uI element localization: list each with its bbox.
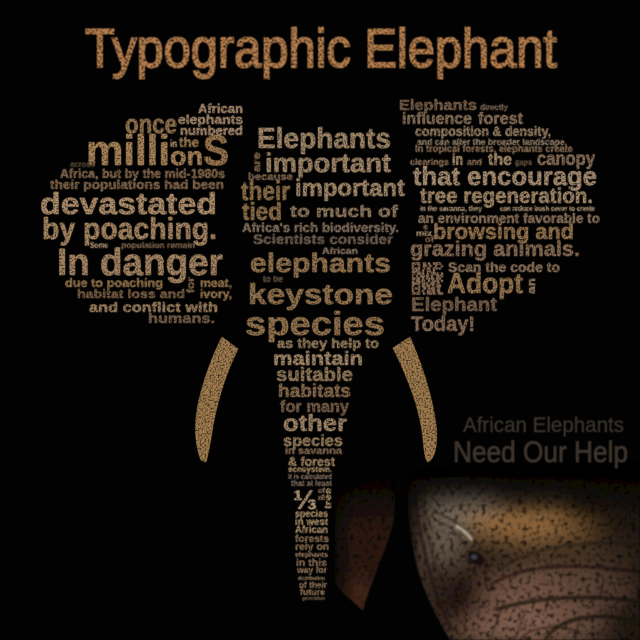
photo: elephant ear fragment bbox=[335, 480, 396, 611]
panel: trunk text: African bbox=[295, 525, 328, 536]
panel: left ear text: population remain bbox=[121, 241, 195, 250]
panel: right ear text: gaps bbox=[515, 158, 533, 167]
panel: right ear text: browsing and bbox=[433, 219, 574, 244]
panel: left ear text bbox=[40, 101, 243, 326]
panel: left ear text: on bbox=[170, 141, 203, 171]
panel: right ear text: an environment favorable to bbox=[418, 210, 600, 226]
panel: right ear text: In tropical forests, elephants create bbox=[415, 144, 573, 155]
panel: left ear text: the bbox=[179, 134, 199, 150]
panel: right ear text: clearings bbox=[410, 157, 449, 167]
panel: right ear text: Elephant bbox=[411, 295, 498, 316]
panel: left ear text: elephants bbox=[178, 112, 243, 127]
panel: trunk text bbox=[273, 335, 379, 602]
photo: skin wrinkles bbox=[415, 485, 640, 640]
photo: elephant face bbox=[335, 476, 640, 640]
tusks bbox=[196, 337, 437, 462]
panel: right ear text: In the savanna, they bbox=[420, 206, 482, 213]
panel: left ear text: Africa, but by the mid-1980s bbox=[60, 166, 225, 181]
panel: trunk text: way for bbox=[296, 565, 327, 575]
panel: right ear text: Adopt bbox=[447, 268, 523, 300]
panel: head text: important bbox=[295, 175, 405, 202]
panel: trunk text: in savanna bbox=[285, 446, 342, 457]
panel: trunk text: ecosystem. bbox=[288, 465, 332, 474]
panel: right ear text: Scan the code to bbox=[448, 259, 560, 275]
panel: trunk text: forests bbox=[295, 534, 329, 545]
panel: left ear text: ivory, bbox=[200, 287, 232, 301]
panel: right ear text: influence bbox=[402, 109, 472, 128]
panel: left ear text: humans. bbox=[148, 310, 215, 326]
panel: left ear text: habitat loss and bbox=[77, 287, 185, 301]
photo: elephant head bbox=[407, 476, 640, 640]
panel: left ear text: numbered bbox=[180, 123, 243, 138]
panel: right ear text: grazing animals. bbox=[410, 238, 580, 261]
panel: head text: tied bbox=[242, 198, 282, 226]
panel: head text: Elephants bbox=[257, 123, 391, 155]
panel: left ear text: due to poaching bbox=[65, 276, 163, 290]
panel: trunk text: of bbox=[318, 488, 326, 495]
panel: right ear text: directly bbox=[480, 103, 509, 112]
panel: trunk text: It is calculated bbox=[288, 474, 332, 481]
panel: right ear text: in bbox=[452, 150, 463, 169]
panel: left ear text: African bbox=[198, 101, 243, 116]
panel: right ear text bbox=[399, 97, 600, 336]
panel: right ear text: Today! bbox=[411, 313, 475, 336]
panel: head text: because bbox=[248, 172, 293, 183]
panel: left ear text: In danger bbox=[57, 242, 223, 284]
panel: trunk text: rely on bbox=[295, 542, 329, 553]
panel: right ear text: a bbox=[423, 224, 428, 231]
left tusk bbox=[196, 337, 238, 462]
panel: right ear text: canopy bbox=[537, 149, 595, 170]
panel: head text: their bbox=[241, 176, 290, 206]
panel: right ear text: the bbox=[488, 150, 512, 169]
panel: head text: to be bbox=[263, 274, 283, 284]
panel: trunk text: tree bbox=[323, 488, 333, 509]
panel: left ear text: S bbox=[203, 127, 229, 175]
panel: trunk text: habitats bbox=[278, 381, 351, 401]
panel: head text: keystone bbox=[248, 279, 393, 311]
panel: trunk text: future bbox=[300, 587, 325, 597]
panel: head text: Africa's rich biodiversity. bbox=[242, 220, 399, 235]
panel: trunk text: that at least bbox=[291, 479, 332, 488]
QR code bbox=[412, 264, 443, 294]
panel: right ear text: forest bbox=[478, 109, 523, 128]
panel: right ear text: of bbox=[425, 235, 434, 244]
panel: right ear text: and can alter the broader landscape. bbox=[417, 137, 567, 147]
panel: left ear text: devastated bbox=[40, 186, 217, 221]
photo: elephant eye bbox=[467, 550, 484, 566]
panel: left ear text: their populations had been bbox=[50, 177, 224, 192]
panel: head text: Scientists consider bbox=[253, 231, 394, 247]
panel: trunk text: elephants bbox=[295, 552, 328, 559]
panel: head text: are bbox=[252, 151, 263, 172]
panel: trunk text: for many bbox=[280, 397, 350, 416]
panel: left ear text: Some bbox=[90, 241, 108, 250]
panel: left ear text: across bbox=[70, 160, 96, 169]
panel: right ear text: and bbox=[467, 157, 482, 167]
panel: trunk text: maintain bbox=[273, 349, 363, 370]
panel: right ear text: mix bbox=[416, 229, 433, 238]
panel: head text: to much of bbox=[290, 202, 398, 221]
panel: right ear text: tree regeneration. bbox=[420, 185, 593, 208]
panel: trunk text: all bbox=[318, 495, 325, 502]
panel: trunk text: species bbox=[295, 509, 328, 520]
tagline: African Elephants bbox=[463, 414, 624, 437]
panel: right ear text: can reduce bush cover to create bbox=[500, 206, 595, 213]
panel: head text: African bbox=[322, 246, 358, 256]
panel: trunk text: other bbox=[283, 410, 347, 436]
panel: left ear text: for bbox=[186, 277, 197, 293]
panel: trunk text: suitable bbox=[276, 365, 353, 386]
panel: right ear text: composition & density, bbox=[415, 123, 551, 139]
panel: left ear text: meat, bbox=[200, 276, 232, 290]
panel: head text: elephants bbox=[250, 248, 391, 278]
panel: left ear text: in bbox=[170, 139, 177, 150]
panel: trunk text: generation bbox=[302, 596, 325, 602]
panel: trunk text: in this bbox=[296, 558, 327, 569]
title: Typographic Elephant bbox=[85, 17, 557, 79]
panel: left ear text: milli bbox=[86, 127, 170, 175]
panel: right ear text: Elephants bbox=[399, 97, 477, 114]
panel: left ear text: by poaching. bbox=[42, 211, 217, 246]
panel: trunk text: ⅓ bbox=[293, 485, 317, 515]
panel: trunk text: in west bbox=[295, 517, 329, 528]
panel: head text: species bbox=[245, 305, 385, 342]
tagline bbox=[453, 414, 628, 469]
panel: left ear text: and conflict with bbox=[89, 299, 218, 315]
panel: head text bbox=[241, 123, 405, 342]
right tusk bbox=[393, 337, 437, 462]
panel: left ear text: once bbox=[125, 109, 177, 139]
panel: head text: important bbox=[265, 148, 391, 178]
panel: trunk text: as they help to bbox=[277, 335, 379, 351]
panel: trunk text: & forest bbox=[288, 454, 336, 469]
panel: trunk text: distribution bbox=[298, 576, 325, 582]
panel: trunk text: species bbox=[283, 433, 343, 450]
panel: right ear text: an bbox=[526, 278, 538, 294]
panel: trunk text: of their bbox=[299, 580, 327, 590]
panel: right ear text: that encourage bbox=[413, 161, 597, 191]
